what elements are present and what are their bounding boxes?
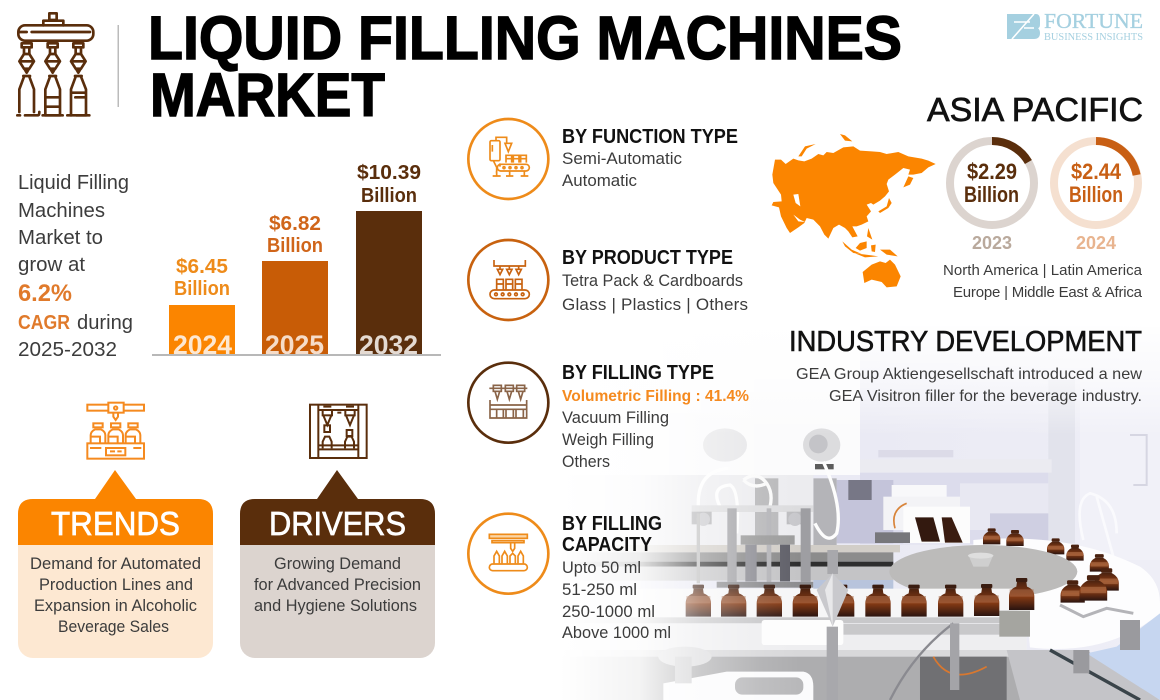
text block: industry development <box>796 366 1142 405</box>
title <box>148 4 902 129</box>
text block: CAGR summary: 2025-2032 <box>18 339 117 361</box>
heading: Asia Pacific: ASIA PACIFIC <box>927 91 1143 128</box>
text block: CAGR summary: grow at <box>18 254 85 276</box>
chart: 2024 donut: $2.44 <box>1071 159 1122 184</box>
segment: by filling capacity: 250-1000 ml <box>562 602 655 621</box>
text block: CAGR summary <box>18 172 133 361</box>
panel: trends <box>18 470 213 658</box>
chart: 2023 donut <box>950 141 1034 253</box>
segment: by filling type: Vacuum Filling <box>562 408 669 427</box>
chart: 2024 donut <box>1054 141 1138 253</box>
segment: by filling capacity: 51-250 ml <box>562 580 637 599</box>
icon: bottle filling nozzles <box>17 13 93 115</box>
logo: Fortune Business Insights <box>1007 9 1143 43</box>
bar chart: market size <box>152 162 441 360</box>
title: LIQUID FILLING MACHINES <box>148 4 902 72</box>
bar: 2032: $10.39 <box>357 162 421 184</box>
text block: CAGR summary: Liquid Filling <box>18 172 129 194</box>
segment: by filling type: Weigh Filling <box>562 430 654 449</box>
pump heads <box>703 428 747 462</box>
segment: by product type: BY PRODUCT TYPE <box>562 247 733 269</box>
rear white unit with bottles <box>892 485 947 505</box>
filler head <box>692 505 813 512</box>
bar: 2024: 2024 <box>173 330 232 360</box>
segment: by filling capacity: Upto 50 ml <box>562 558 641 577</box>
bar: 2025: $6.82 <box>269 213 321 235</box>
segment: by filling capacity <box>468 513 671 642</box>
icon: product type <box>468 240 548 320</box>
bar: 2024 <box>169 256 235 360</box>
panel: trends: Demand for Automated <box>30 554 201 573</box>
segment: by function type: BY FUNCTION TYPE <box>562 126 738 148</box>
panel: drivers: DRIVERS <box>269 505 406 542</box>
text block: industry development: GEA Group Aktiengesellschaft introduced a new <box>796 366 1142 383</box>
title: MARKET <box>150 61 385 129</box>
segment: by function type: Automatic <box>562 171 637 190</box>
chart: 2024 donut: 2024 <box>1076 233 1116 253</box>
segment: by filling type: BY FILLING TYPE <box>562 362 714 384</box>
text block: CAGR summary: Machines <box>18 200 105 222</box>
segment: by product type <box>468 240 748 320</box>
chart: 2023 donut: $2.29 <box>967 159 1017 184</box>
panel: trends: Beverage Sales <box>58 617 169 636</box>
rear rail <box>550 545 900 552</box>
text block: CAGR summary: during <box>77 312 133 334</box>
panel: trends: Expansion in Alcoholic <box>34 596 197 615</box>
logo: Fortune Business Insights: FORTUNE <box>1044 9 1143 33</box>
bar: 2032: Billion <box>361 185 417 207</box>
heading: industry development: INDUSTRY DEVELOPMENT <box>789 326 1142 358</box>
segment: by filling type: Others <box>562 452 610 471</box>
icon: trends machine <box>87 403 144 459</box>
segment: by product type: Glass | Plastics | Others <box>562 295 748 314</box>
segment: by filling capacity: Above 1000 ml <box>562 623 671 642</box>
bar: 2024: Billion <box>174 278 230 300</box>
logo: Fortune Business Insights: BUSINESS INSIGHTS <box>1044 32 1143 43</box>
chart: 2023 donut: Billion <box>964 182 1019 207</box>
turntable <box>973 538 1160 649</box>
panel: trends: TRENDS <box>51 505 180 542</box>
panel: trends: Production Lines and <box>39 575 193 594</box>
text block: CAGR summary: 6.2% <box>18 280 72 307</box>
base and floor <box>550 650 1030 657</box>
segment: by function type <box>468 119 738 199</box>
bar: 2032: 2032 <box>359 330 418 360</box>
text block: industry development: GEA Visitron filler for the beverage industry. <box>829 388 1142 405</box>
bar: 2032 <box>356 162 422 360</box>
bottles <box>686 585 711 617</box>
icon: filling type <box>468 363 548 443</box>
icon: filling capacity <box>468 514 548 594</box>
panel: drivers: and Hygiene Solutions <box>254 596 417 615</box>
panel: drivers <box>240 470 435 658</box>
text block: CAGR summary: Market to <box>18 227 103 249</box>
text block: other regions <box>943 262 1143 301</box>
conveyor <box>550 589 1017 619</box>
segment: by function type: Semi-Automatic <box>562 149 682 168</box>
panel: drivers: Growing Demand <box>274 554 401 573</box>
segment: by product type: Tetra Pack & Cardboards <box>562 271 743 290</box>
bar: 2025: 2025 <box>265 330 324 360</box>
text block: CAGR summary: CAGR <box>18 312 70 334</box>
icon: Asia Pacific map <box>772 134 936 287</box>
segment: by filling capacity: CAPACITY <box>562 534 653 556</box>
segment: by filling type <box>468 362 749 471</box>
segment: by filling capacity: BY FILLING <box>562 513 662 535</box>
bar: 2025 <box>262 213 328 360</box>
text block: other regions: Europe | Middle East & Africa <box>953 284 1143 301</box>
chart: 2024 donut: Billion <box>1069 182 1123 207</box>
bar: 2024: $6.45 <box>176 256 228 278</box>
icon: function type <box>468 119 548 199</box>
photo: filling machine production line <box>0 320 1160 700</box>
panel: drivers: for Advanced Precision <box>254 575 421 594</box>
funnel <box>827 550 838 574</box>
bar: 2025: Billion <box>267 235 323 257</box>
icon: drivers machine <box>310 405 367 458</box>
segment: by filling type: Volumetric Filling : 41.4% <box>562 388 749 405</box>
text block: other regions: North America | Latin America <box>943 262 1143 279</box>
chart: 2023 donut: 2023 <box>972 233 1012 253</box>
